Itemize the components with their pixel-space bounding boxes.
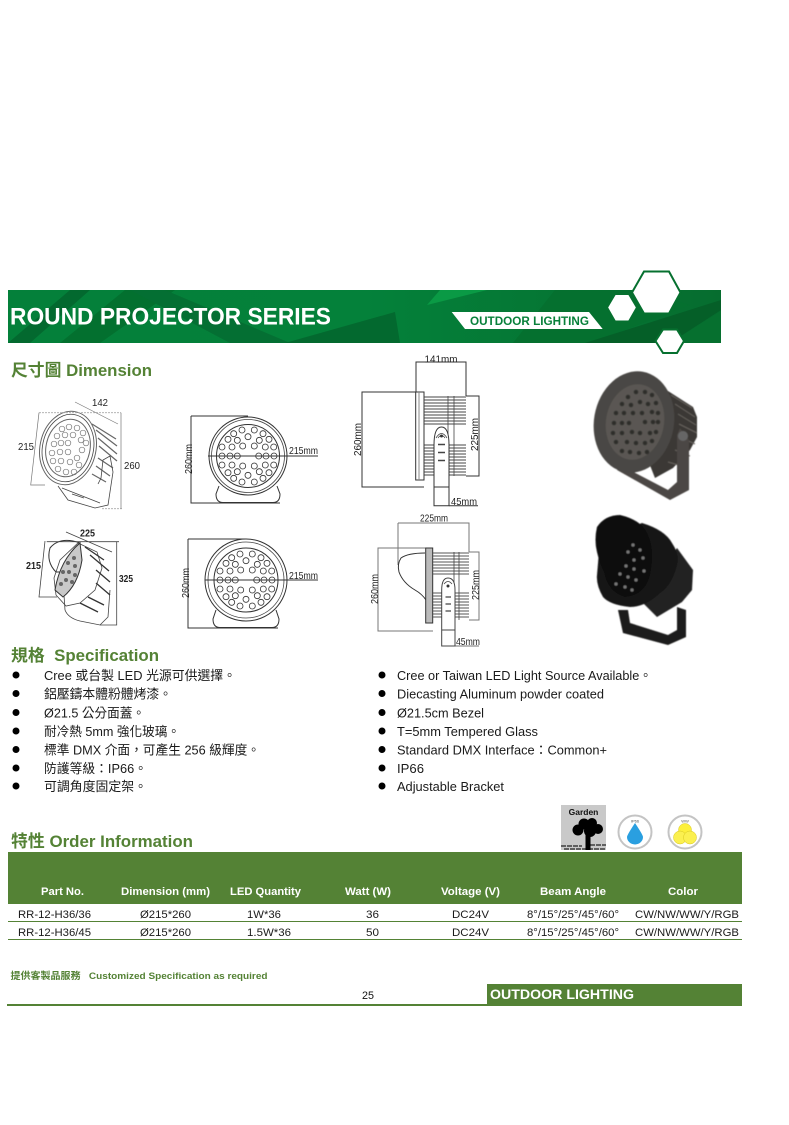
- dimension labels: 260mm: [183, 444, 195, 474]
- table row 2: 1.5W*36: [247, 927, 291, 939]
- table row 1: 8°/15°/25°/45°/60°: [527, 909, 619, 921]
- heading: dimension: 尺寸圖 Dimension: [11, 361, 152, 380]
- dimension labels: [369, 512, 482, 648]
- dimension labels: 260: [124, 460, 140, 472]
- specification list: english: IP66: [397, 761, 424, 776]
- icon: ip66 water drop: IP66: [631, 818, 640, 824]
- dimension labels: 325: [119, 573, 133, 585]
- drawing: perspective view with shield, bottom: [26, 528, 133, 625]
- dimension labels: 141mm: [424, 354, 458, 366]
- table header: Dimension (mm): [121, 886, 210, 898]
- ribbon: outdoor lighting: OUTDOOR LIGHTING: [470, 314, 589, 328]
- dimension labels: [180, 568, 318, 598]
- specification list: chinese: 耐冷熱 5mm 強化玻璃。: [44, 724, 180, 739]
- specification list: english: Ø21.5cm Bezel: [397, 706, 484, 720]
- icon: garden: [561, 805, 606, 850]
- ribbon: outdoor lighting: [452, 312, 603, 329]
- specification list: chinese: 可調角度固定架。: [44, 779, 147, 794]
- specification list: english: T=5mm Tempered Glass: [397, 724, 538, 739]
- table header: [8, 852, 742, 904]
- dimension labels: [26, 528, 133, 585]
- dimension labels: 215mm: [289, 570, 318, 582]
- photo: round projector with shield, black: [596, 515, 693, 645]
- table row 1: [8, 909, 742, 922]
- drawing: front view, top: [183, 416, 318, 503]
- table header: Part No.: [41, 886, 84, 898]
- drawing: side view, top: [352, 354, 481, 508]
- specification list: chinese: 標準 DMX 介面，可產生 256 級輝度。: [44, 742, 260, 758]
- dimension labels: 215: [26, 560, 41, 572]
- dimension labels: 45mm: [451, 496, 477, 508]
- drawing: side view with shield, bottom: [369, 512, 482, 648]
- heading: specification: 規格 Specification: [11, 646, 159, 665]
- table row 2: 50: [366, 927, 379, 939]
- specification list: chinese: 鋁壓鑄本體粉體烤漆。: [44, 686, 172, 702]
- icon: ww colour: [668, 816, 702, 848]
- dimension labels: 45mm: [456, 636, 480, 648]
- specification list: chinese: 防護等級：IP66。: [44, 761, 147, 776]
- table header: Watt (W): [345, 886, 391, 898]
- specification list: english: [378, 668, 652, 794]
- dimension labels: 215mm: [289, 445, 318, 457]
- table row 1: 1W*36: [247, 909, 281, 921]
- icon: ww colour: WW: [681, 818, 689, 824]
- table header: LED Quantity: [230, 886, 302, 898]
- specification list: english: Cree or Taiwan LED Light Source Available。: [397, 668, 652, 683]
- table row 2: CW/NW/WW/Y/RGB: [635, 927, 739, 939]
- dimension labels: 260mm: [352, 423, 364, 456]
- dimension labels: 260mm: [180, 568, 192, 598]
- table header: Color: [668, 886, 699, 898]
- photo: round projector, bronze: [586, 365, 697, 500]
- dimension labels: 215: [18, 441, 34, 453]
- dimension labels: [183, 444, 318, 474]
- specification list: chinese: Ø21.5 公分面蓋。: [44, 706, 145, 720]
- icon: garden: Garden: [569, 807, 598, 817]
- page number: 25: [362, 990, 374, 1002]
- title: ROUND PROJECTOR SERIES: [10, 304, 331, 330]
- hexagon decorations: [607, 272, 684, 353]
- icon: ip66 water drop: [618, 816, 652, 848]
- table row 2: RR-12-H36/45: [18, 927, 91, 939]
- footer bar: [7, 984, 742, 1006]
- table row 1: 36: [366, 909, 379, 921]
- table row 1: RR-12-H36/36: [18, 909, 91, 921]
- drawing: front view, bottom: [180, 539, 318, 628]
- dimension labels: [352, 354, 481, 508]
- dimension labels: 225mm: [469, 418, 481, 451]
- specification list: english: Adjustable Bracket: [397, 779, 504, 794]
- heading: order information: 特性 Order Information: [11, 832, 193, 851]
- specification list: english: Diecasting Aluminum powder coated: [397, 686, 604, 702]
- order table: [8, 852, 742, 940]
- dimension labels: 225mm: [470, 570, 482, 600]
- table row 2: DC24V: [452, 927, 490, 939]
- dimension labels: 142: [92, 397, 108, 409]
- table row 1: DC24V: [452, 909, 490, 921]
- table header: Beam Angle: [540, 886, 606, 898]
- table header: Voltage (V): [441, 886, 500, 898]
- customized note: 提供客製品服務 Customized Specification as required: [10, 970, 268, 982]
- table row 1: Ø215*260: [140, 909, 191, 921]
- dimension labels: 225mm: [420, 512, 448, 524]
- table row 1: CW/NW/WW/Y/RGB: [635, 909, 739, 921]
- drawing: perspective view, top: [18, 397, 140, 509]
- footer bar: OUTDOOR LIGHTING: [490, 986, 634, 1002]
- dimension labels: [18, 397, 140, 472]
- table row 2: 8°/15°/25°/45°/60°: [527, 927, 619, 939]
- dimension labels: 225: [80, 528, 95, 540]
- specification list: english: Standard DMX Interface：Common+: [397, 742, 607, 758]
- specification list: chinese: [12, 668, 260, 794]
- table row 2: Ø215*260: [140, 927, 191, 939]
- specification list: chinese: Cree 或台製 LED 光源可供選擇。: [44, 668, 236, 683]
- table row 2: [8, 927, 742, 940]
- dimension labels: 260mm: [369, 574, 381, 604]
- header banner: [8, 272, 721, 353]
